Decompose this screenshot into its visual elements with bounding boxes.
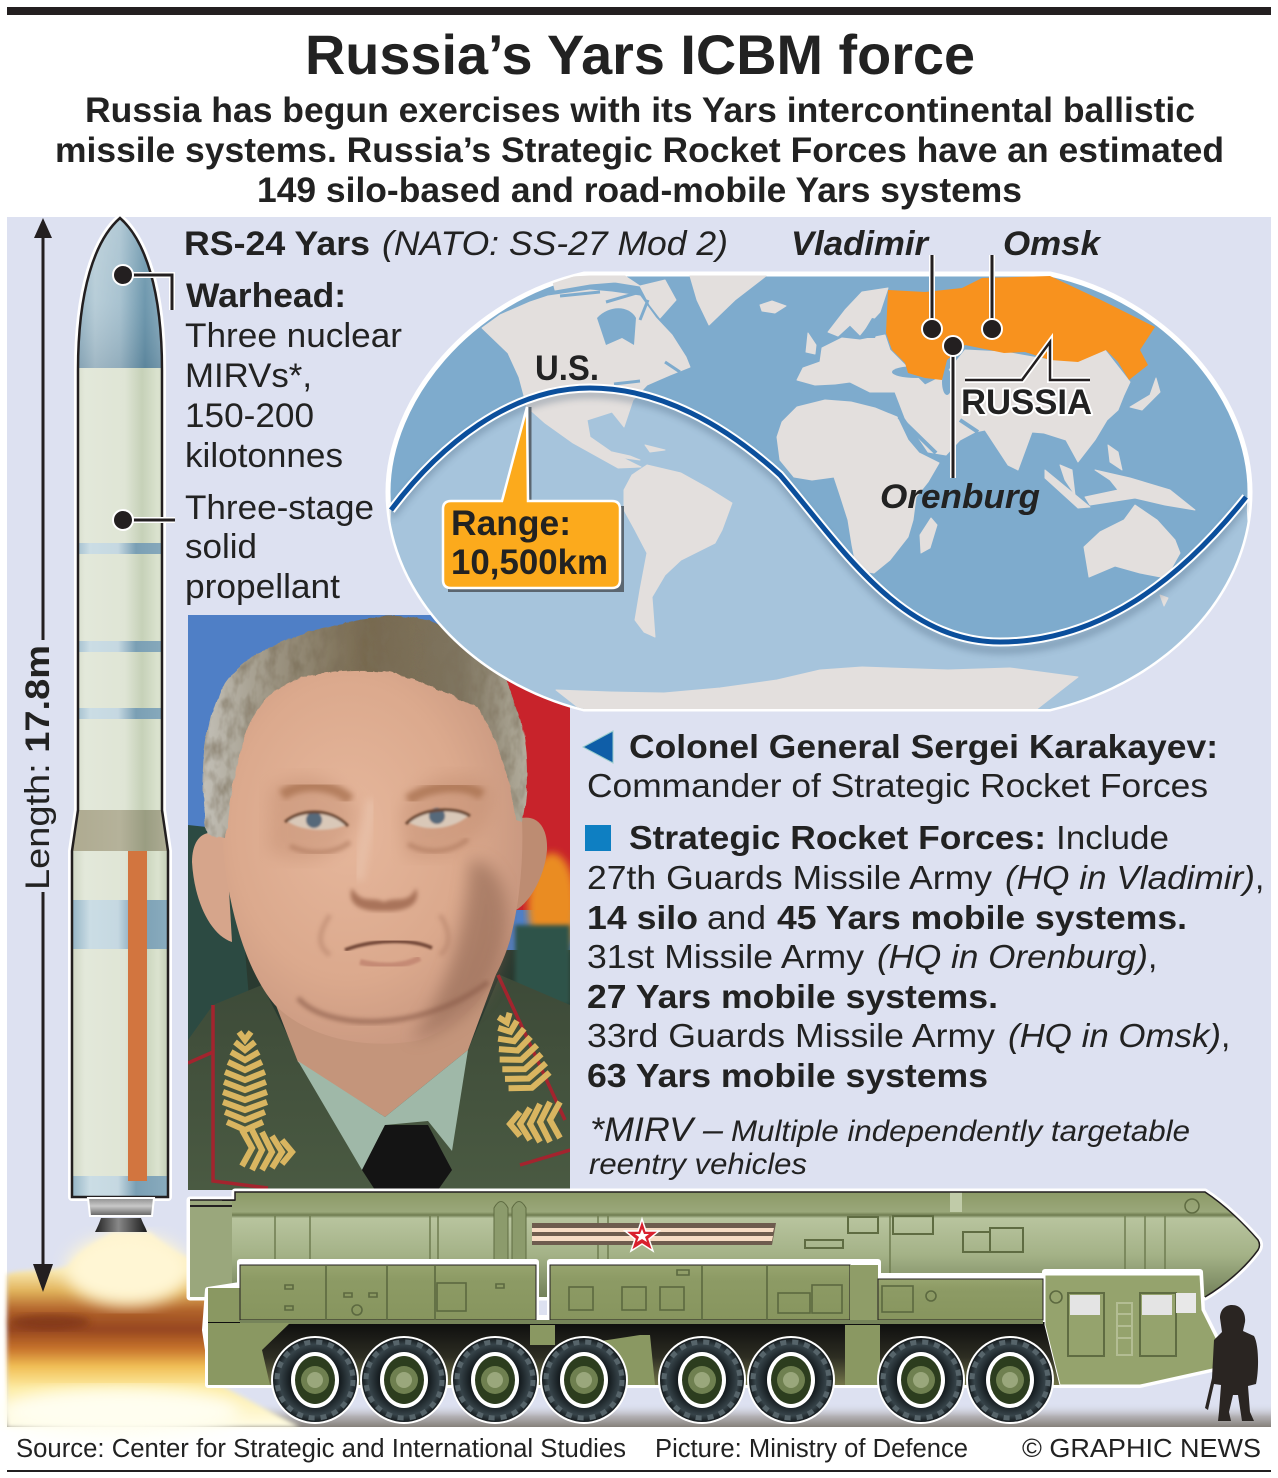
top rule [7, 7, 1271, 15]
wheels [271, 1336, 1054, 1424]
footer source: © GRAPHIC NEWS [1022, 1435, 1261, 1463]
MIRV footnote: Multiple independently targetable [731, 1115, 1190, 1148]
commander text: Commander of Strategic Rocket Forces [587, 768, 1208, 805]
propellant label and leader: propellant [185, 568, 341, 606]
strategic rocket forces text: 33rd Guards Missile Army [587, 1018, 995, 1055]
subtitle: missile systems. Russia’s Strategic Rocket Forces have an estimated [55, 131, 1224, 170]
strategic rocket forces text: , [1148, 939, 1157, 976]
Russia [886, 276, 1155, 380]
soldier silhouette [1205, 1305, 1258, 1421]
warhead label and leader: 150-200 [185, 397, 314, 435]
seas and bays [597, 308, 952, 395]
commander text: Colonel General Sergei Karakayev: [629, 729, 1218, 766]
strategic rocket forces text: 63 Yars mobile systems [587, 1058, 988, 1095]
missile name [184, 225, 728, 263]
propellant label and leader: solid [185, 528, 257, 566]
title: Russia’s Yars ICBM force [305, 23, 975, 86]
map shadow below arc [391, 394, 1246, 650]
portrait photo [188, 615, 576, 1190]
shirt and tie [298, 1050, 468, 1170]
warhead label and leader [113, 265, 402, 475]
strategic rocket forces text: (HQ in Omsk) [1008, 1018, 1221, 1055]
strategic rocket forces text: , [1255, 860, 1264, 897]
warhead label and leader: Warhead: [186, 277, 346, 315]
length label: Length: 17.8m [19, 645, 57, 890]
range callout: 10,500km [451, 543, 608, 582]
cab [1045, 1275, 1217, 1385]
warhead label and leader: Three nuclear [185, 317, 402, 355]
ribbon stripes [532, 1223, 776, 1245]
missile range arc [391, 388, 1246, 642]
icon: blue square [585, 825, 611, 851]
world map [380, 225, 1260, 720]
Orenburg marker: Orenburg [880, 478, 1040, 516]
range callout [443, 407, 624, 592]
range zone shading [380, 388, 1260, 720]
engine nozzle [88, 1198, 154, 1216]
missile on launcher [190, 1190, 1270, 1300]
Omsk marker: Omsk [1003, 225, 1102, 263]
MIRV footnote [589, 1111, 1190, 1181]
subtitle [55, 91, 1224, 210]
eyes and brows [282, 786, 482, 852]
flame [0, 1232, 300, 1436]
ears [192, 833, 232, 942]
collar insignia [223, 1007, 560, 1170]
subtitle: Russia has begun exercises with its Yars intercontinental ballistic [85, 91, 1195, 130]
length arrow and label [19, 218, 57, 1292]
footer source: Picture: Ministry of Defence [655, 1435, 968, 1463]
rocket [70, 218, 170, 1232]
neck [276, 974, 496, 1117]
panel details [285, 1265, 1062, 1320]
range callout: Range: [451, 504, 571, 543]
icon: blue pointer [583, 731, 613, 763]
hair [203, 616, 527, 838]
strategic rocket forces text [585, 820, 1264, 1095]
propellant label and leader [113, 489, 374, 606]
strategic rocket forces text: 45 Yars mobile systems. [777, 900, 1187, 937]
right sprig [496, 1012, 562, 1144]
red star [625, 1219, 659, 1251]
strategic rocket forces text: (HQ in Orenburg) [877, 939, 1148, 976]
face [222, 653, 522, 1044]
Omsk marker [982, 225, 1102, 339]
Russia label [961, 342, 1092, 422]
nose and mouth [321, 800, 448, 965]
footer source [16, 1435, 1261, 1463]
warhead label and leader: MIRVs*, [185, 357, 312, 395]
strategic rocket forces text: Include [1056, 820, 1169, 857]
Orenburg marker [880, 336, 1040, 516]
ground strip [7, 1403, 1271, 1427]
strategic rocket forces text: 27th Guards Missile Army [587, 860, 992, 897]
strategic rocket forces text: 31st Missile Army [587, 939, 864, 976]
strategic rocket forces text: 14 silo [587, 900, 698, 937]
Vladimir marker: Vladimir [791, 225, 930, 263]
land masses [482, 276, 1195, 712]
propellant label and leader: Three-stage [185, 489, 374, 527]
truck chassis [205, 1262, 1217, 1385]
strategic rocket forces text: Strategic Rocket Forces: [629, 820, 1046, 857]
commander text [583, 729, 1218, 805]
uniform [188, 975, 570, 1190]
missile name: RS-24 Yars [184, 225, 370, 263]
MIRV footnote: reentry vehicles [589, 1148, 807, 1181]
footer source: Source: Center for Strategic and International Studies [16, 1435, 626, 1463]
subtitle: 149 silo-based and road-mobile Yars systems [257, 171, 1022, 210]
strategic rocket forces text: , [1221, 1018, 1230, 1055]
missile name: (NATO: SS-27 Mod 2) [382, 225, 728, 263]
strategic rocket forces text: 27 Yars mobile systems. [587, 979, 998, 1016]
strategic rocket forces text: (HQ in Vladimir) [1005, 860, 1255, 897]
Yars mobile launcher [190, 1190, 1270, 1424]
strategic rocket forces text: and [707, 900, 766, 937]
U.S. label: U.S. [535, 349, 599, 388]
left sprig [223, 1032, 292, 1170]
Russia label: RUSSIA [961, 383, 1092, 422]
MIRV footnote: *MIRV – [590, 1111, 724, 1149]
warhead nose cone [79, 220, 161, 368]
warhead label and leader: kilotonnes [185, 437, 343, 475]
Vladimir marker [791, 225, 942, 339]
